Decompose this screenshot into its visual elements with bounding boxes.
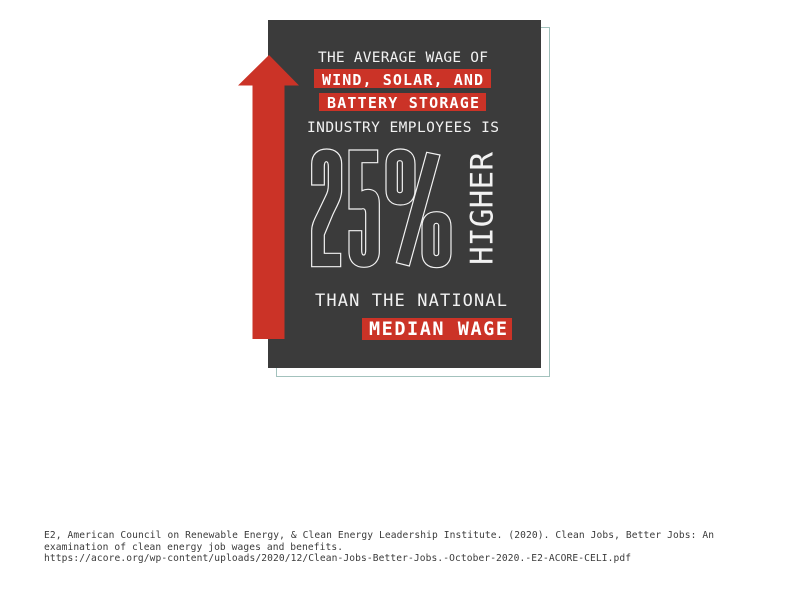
highlight: median wage: MEDIAN WAGE: [369, 319, 507, 340]
percent sign: [386, 149, 451, 268]
source citation: [44, 530, 714, 564]
rotated label: higher: HIGHER: [464, 152, 500, 265]
source citation: E2, American Council on Renewable Energy, & Clean Energy Leadership Institute. (2020). Clean Jobs, Better Jobs: An: [44, 530, 714, 541]
digit 5: [349, 150, 379, 267]
heading: the average wage of: THE AVERAGE WAGE OF: [318, 50, 488, 66]
highlight: wind, solar, and: WIND, SOLAR, AND: [322, 71, 483, 89]
highlight: battery storage: BATTERY STORAGE: [327, 94, 479, 112]
dark panel: [268, 20, 541, 368]
source citation: examination of clean energy job wages and benefits.: [44, 542, 343, 553]
icon: red up arrow: [238, 55, 299, 339]
offset outline frame: [276, 28, 550, 376]
digit 2: [312, 149, 342, 267]
text: industry employees is: INDUSTRY EMPLOYEES IS: [307, 120, 499, 136]
big number outline: 25%: [312, 149, 451, 268]
text: than the national: THAN THE NATIONAL: [315, 291, 507, 311]
source citation: https://acore.org/wp-content/uploads/2020/12/Clean-Jobs-Better-Jobs.-October-2020.-E2-ACORE-CELI.pdf: [44, 553, 631, 564]
